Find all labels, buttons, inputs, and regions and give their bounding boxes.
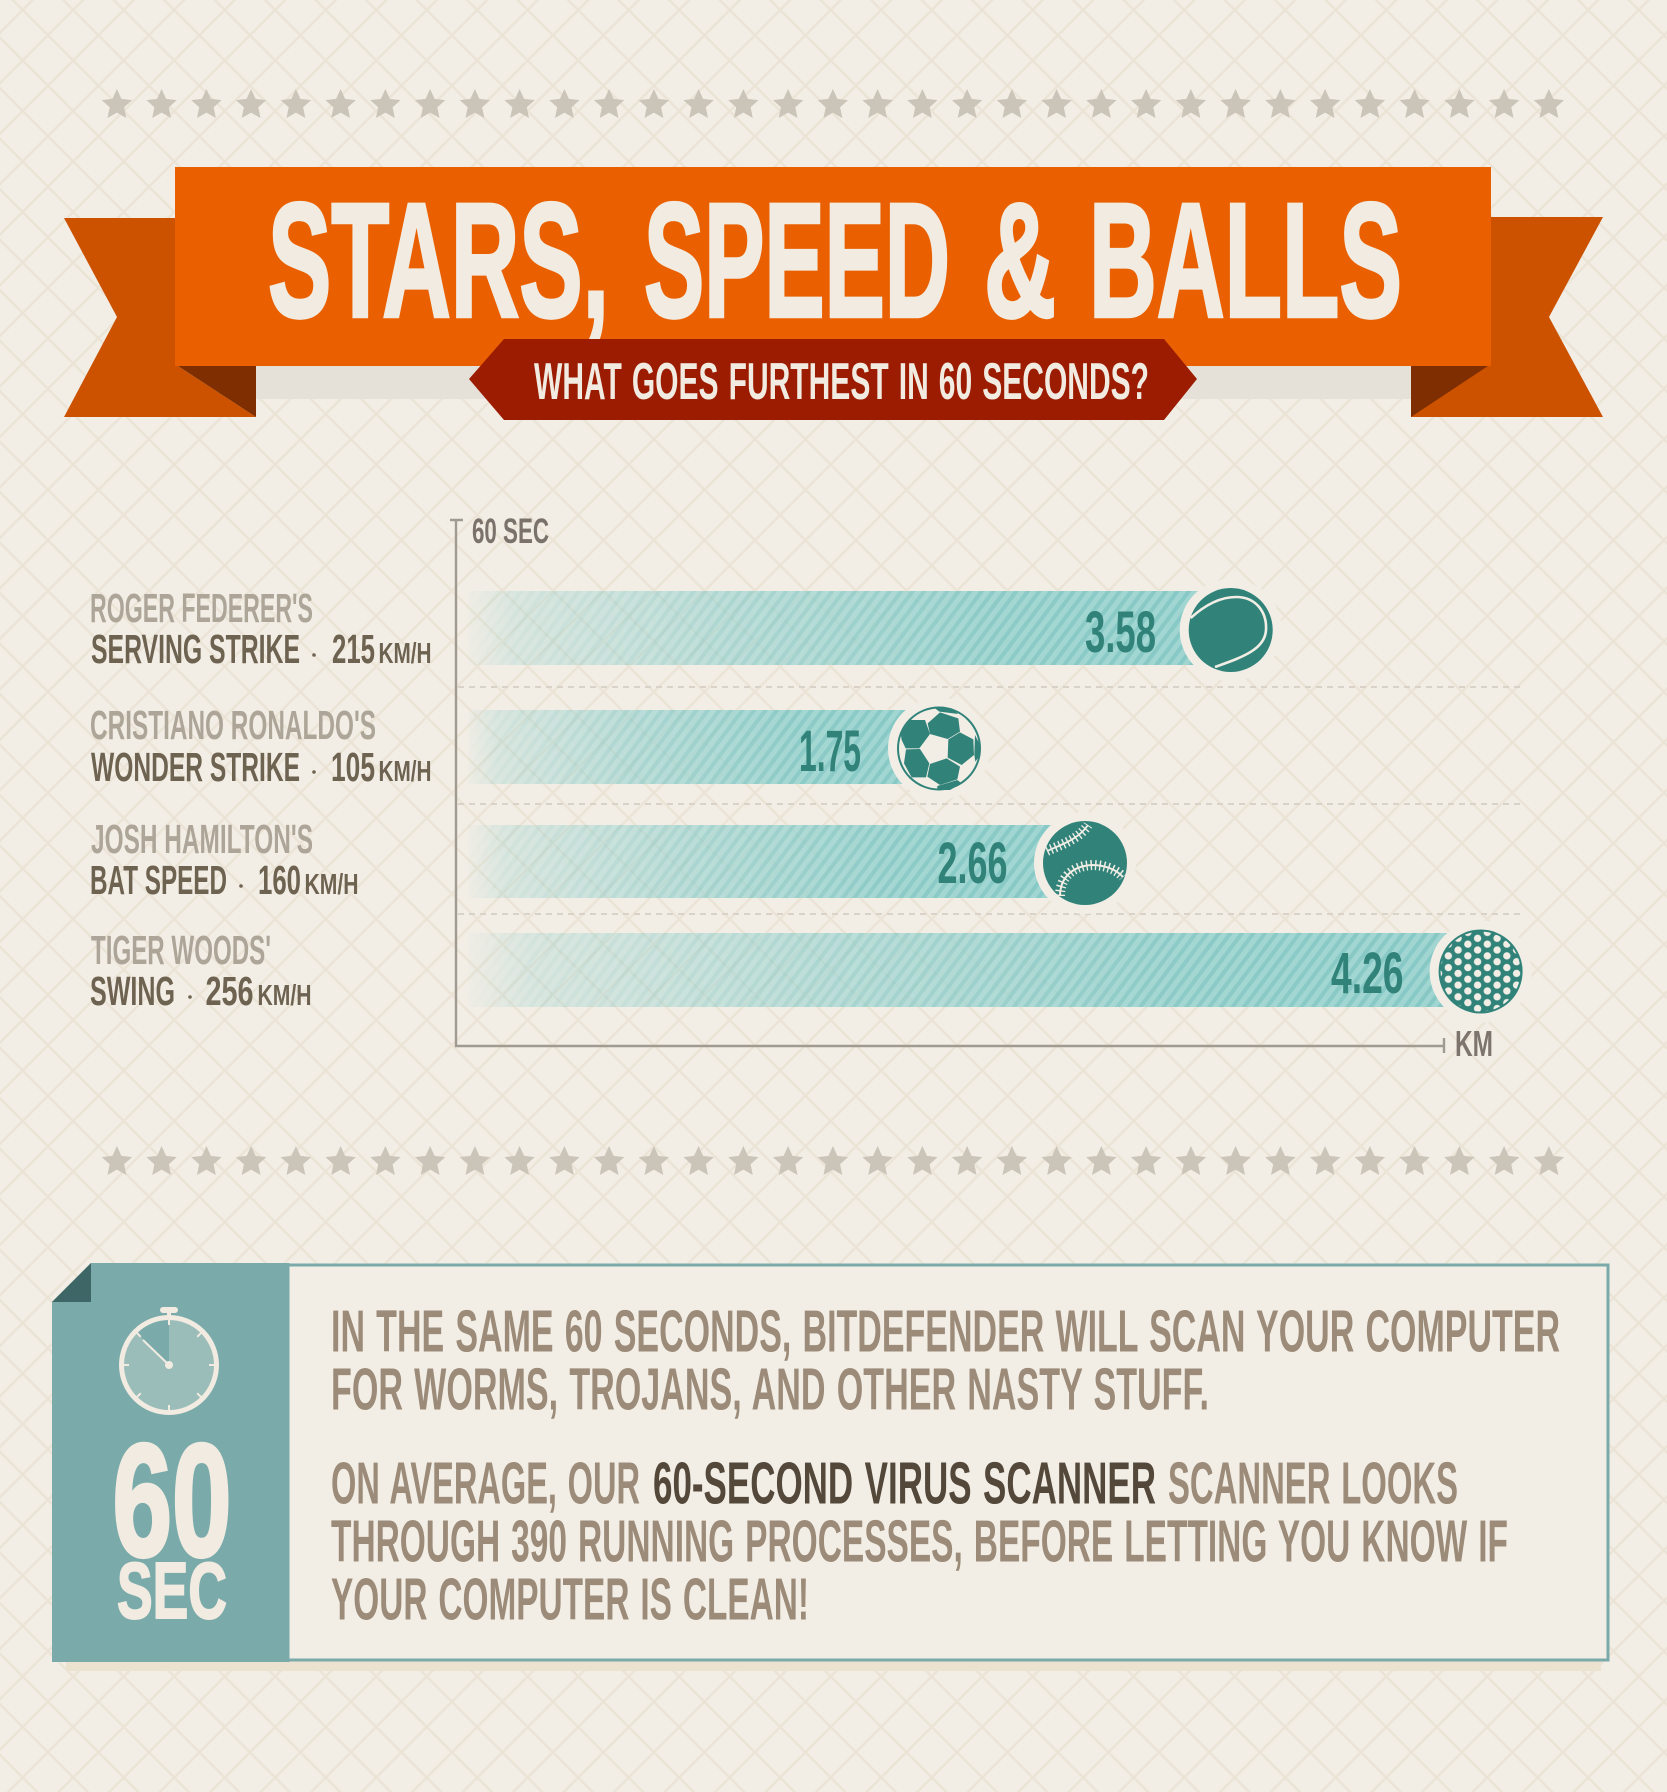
big 60: 60	[112, 1410, 232, 1590]
paragraph 2: ON AVERAGE, OUR	[331, 1450, 640, 1516]
right ribbon tail	[1411, 217, 1603, 417]
main orange banner	[175, 167, 1491, 366]
label: Hamilton: 160	[258, 857, 301, 903]
bottom star row	[102, 1146, 1564, 1175]
left ribbon tail	[64, 218, 256, 417]
icon: baseball	[1043, 821, 1127, 905]
label: Ronaldo: 105	[331, 744, 375, 790]
label: Hamilton: BAT SPEED	[90, 857, 227, 903]
paragraph 2: 60-SECOND VIRUS SCANNER	[653, 1450, 1156, 1516]
label: Hamilton	[90, 816, 358, 903]
left fold	[178, 366, 256, 417]
axes	[450, 520, 1444, 1053]
icon: soccer ball	[898, 708, 980, 790]
y axis label: 60 SEC	[472, 512, 549, 551]
corner fold	[52, 1263, 91, 1302]
panel: 60-second callout	[52, 1263, 1608, 1671]
top star row	[102, 89, 1564, 118]
chart	[90, 512, 1532, 1064]
teal side block	[52, 1263, 290, 1662]
label: Federer: SERVING STRIKE	[91, 626, 300, 672]
paragraph 2	[331, 1450, 1508, 1632]
title text: &	[984, 168, 1056, 352]
value 2.66: 2.66	[938, 831, 1008, 896]
paragraph 1	[331, 1298, 1560, 1422]
label: Woods: SWING	[90, 968, 175, 1014]
label: Woods	[90, 927, 312, 1014]
label: Ronaldo: KM/H	[378, 756, 432, 788]
label: Federer: 215	[332, 626, 375, 672]
paragraph 2: YOUR COMPUTER IS CLEAN!	[331, 1566, 809, 1632]
title text: BALLS	[1089, 168, 1402, 352]
value 3.58: 3.58	[1085, 600, 1156, 665]
label: Ronaldo: WONDER STRIKE	[91, 744, 300, 790]
icon: stopwatch	[122, 1307, 216, 1412]
banner shadow	[256, 366, 1411, 399]
label: Ronaldo	[90, 702, 432, 790]
title text: STARS,	[268, 168, 609, 352]
bar: Woods	[468, 920, 1532, 1022]
right fold	[1411, 366, 1488, 417]
label: Woods: TIGER WOODS'	[91, 927, 271, 973]
label: Federer: ROGER FEDERER'S	[90, 585, 313, 631]
bar: Ronaldo	[468, 698, 990, 800]
title text: SPEED	[644, 168, 950, 352]
red subtitle ribbon	[469, 339, 1197, 420]
value 1.75: 1.75	[799, 719, 861, 784]
value 4.26: 4.26	[1331, 941, 1404, 1006]
bar: Hamilton	[468, 812, 1136, 914]
icon: tennis ball	[1189, 588, 1273, 672]
label: Federer	[90, 585, 432, 672]
bar: Federer	[468, 579, 1282, 681]
SEC: SEC	[117, 1546, 227, 1635]
label: Hamilton: JOSH HAMILTON'S	[91, 816, 313, 862]
title banner	[64, 167, 1603, 420]
text panel	[280, 1265, 1608, 1660]
label: Woods: KM/H	[258, 980, 312, 1012]
title text	[268, 168, 1402, 352]
subtitle text: WHAT GOES FURTHEST IN 60 SECONDS?	[534, 353, 1149, 411]
label: Federer: KM/H	[378, 638, 432, 670]
label: Woods: 256	[206, 968, 254, 1014]
label: Hamilton: KM/H	[304, 869, 358, 901]
panel shadow	[66, 1650, 1601, 1671]
icon: golf ball	[1439, 930, 1523, 1014]
x axis label: KM	[1455, 1023, 1493, 1064]
label: Ronaldo: CRISTIANO RONALDO'S	[90, 702, 376, 748]
dashed row dividers	[458, 687, 1522, 914]
